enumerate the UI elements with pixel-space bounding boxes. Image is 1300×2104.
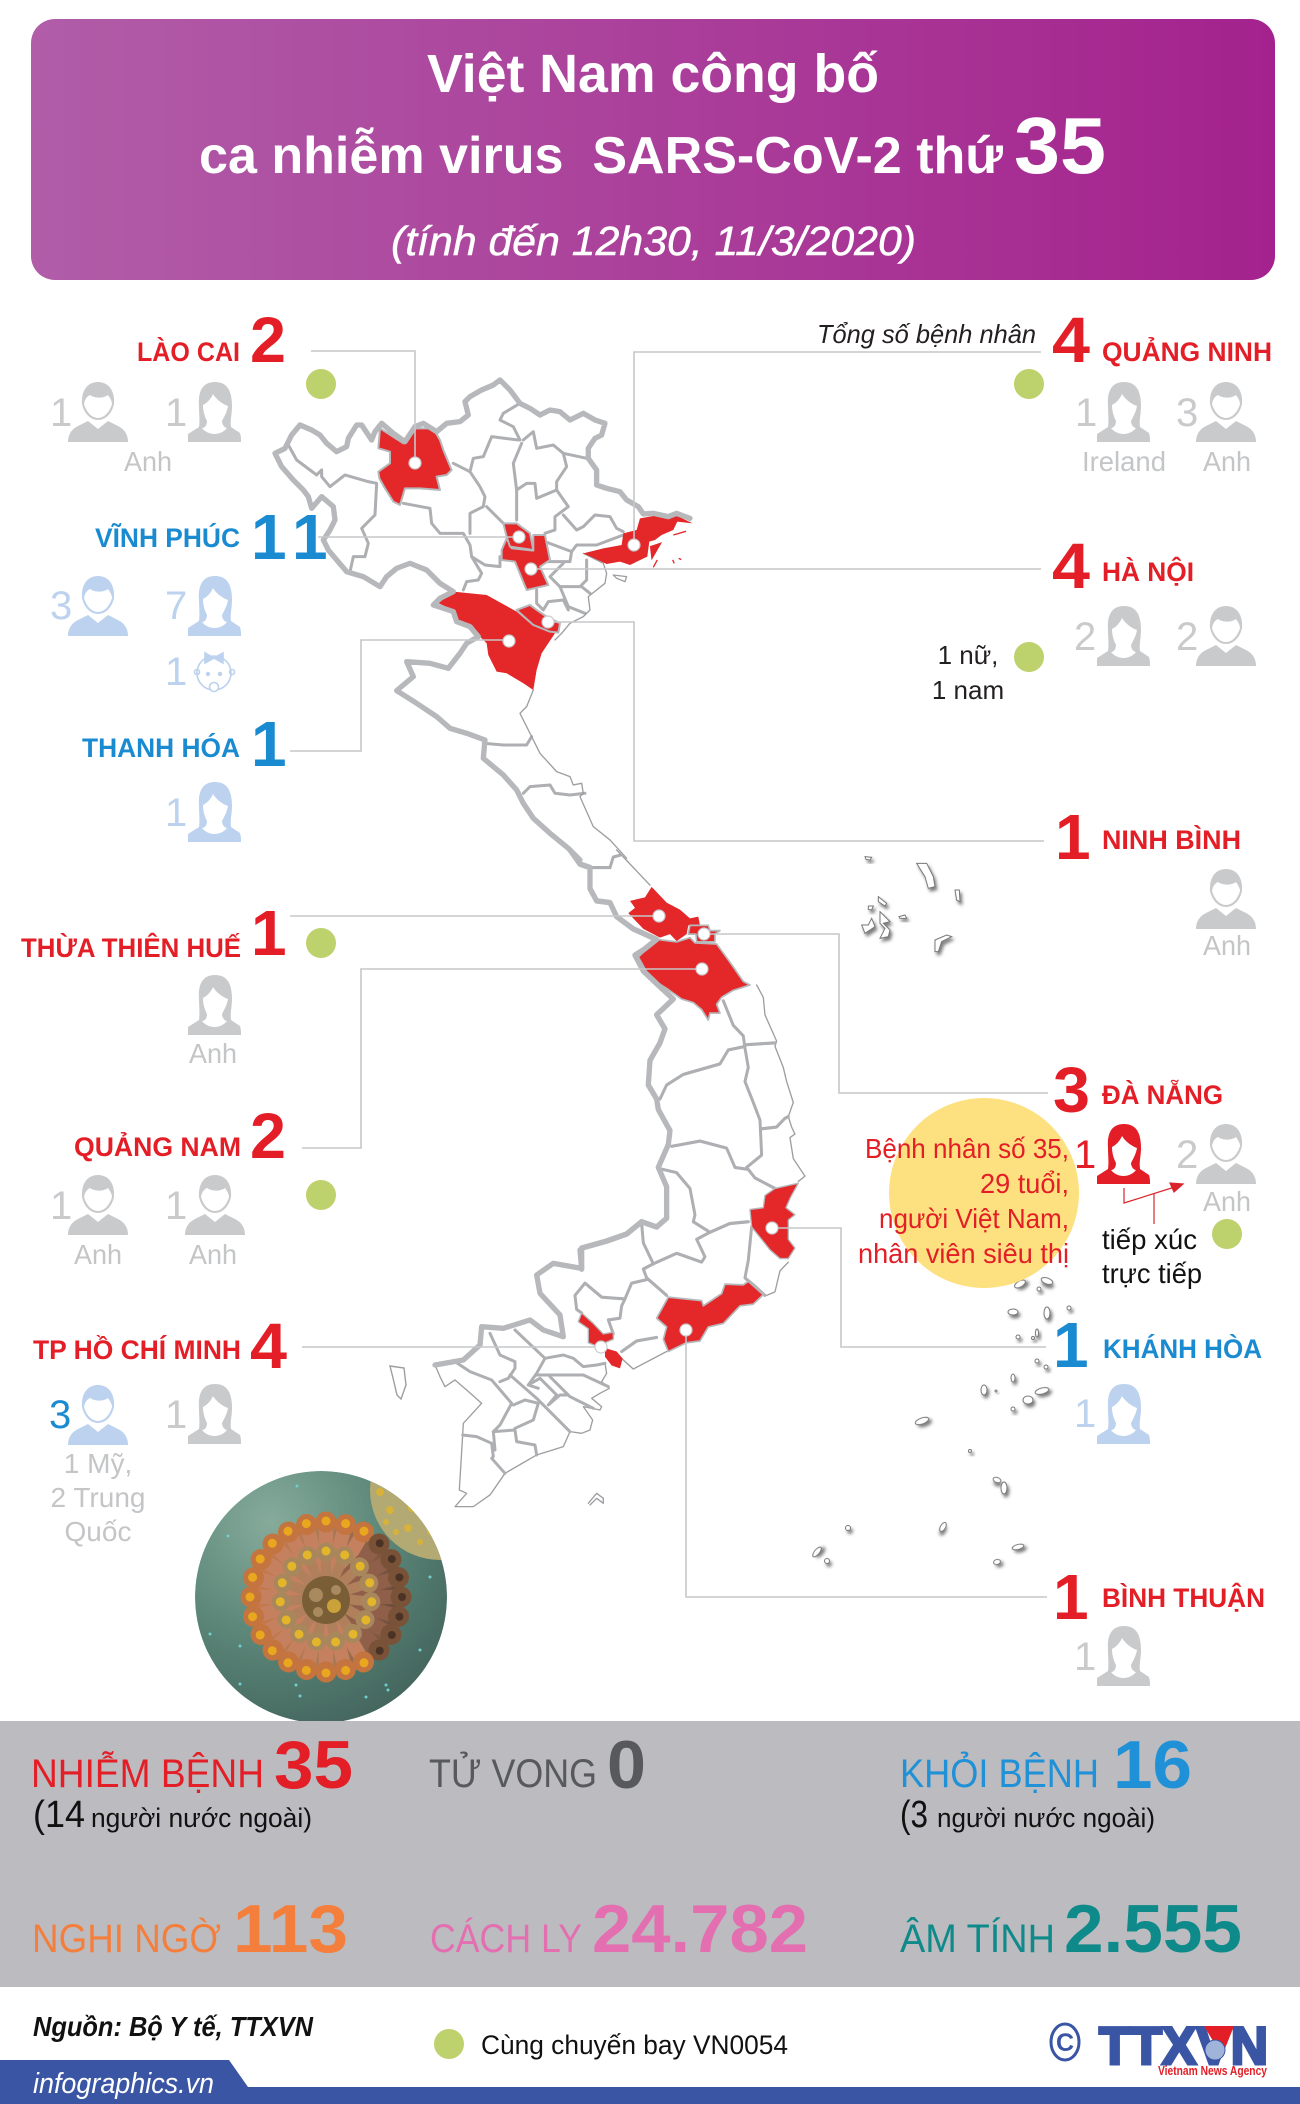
- callout: patient 35: người Việt Nam,: [879, 1203, 1069, 1234]
- note: foreigners among infected: người nước ngoài): [91, 1803, 312, 1833]
- patients: Anh: [1203, 1186, 1251, 1217]
- logo: TTXVN: Vietnam News Agency: [1158, 2063, 1268, 2078]
- patients: [50, 576, 241, 694]
- note: foreigners among infected: (14: [33, 1794, 85, 1836]
- label: NINH BÌNH: [1102, 824, 1241, 855]
- callout: patient 35: nhân viên siêu thị: [858, 1238, 1069, 1269]
- patients: [49, 1384, 241, 1445]
- title number 35: 35: [1014, 101, 1106, 190]
- patients: Anh: [74, 1239, 122, 1270]
- website: infographics.vn: [33, 2068, 214, 2100]
- patients: Anh: [1203, 446, 1251, 477]
- logo: TTXVN: C: [1056, 2029, 1074, 2057]
- province: TP Hồ Chí Minh: [578, 1313, 613, 1347]
- same-flight marker: [1014, 642, 1044, 672]
- same-flight marker: [306, 1180, 336, 1210]
- label: ĐÀ NẴNG: [1102, 1078, 1223, 1110]
- count: 1: [251, 897, 287, 969]
- stat: deaths: [429, 1727, 646, 1803]
- patient: [1196, 869, 1256, 961]
- title line 2: ca nhiễm virus SARS-CoV-2 thứ: [199, 127, 1003, 185]
- stat: suspected: [32, 1891, 348, 1967]
- note: foreigners among recovered: [900, 1794, 1155, 1836]
- stat: negative: ÂM TÍNH: [900, 1916, 1055, 1961]
- panel: TP Hồ Chí Minh: [33, 1310, 607, 1547]
- legend: same flight: Cùng chuyến bay VN0054: [481, 2030, 788, 2060]
- patients: 2: [1176, 1133, 1198, 1177]
- patient: 1: [1074, 1635, 1096, 1679]
- island: Phú Quốc: [390, 1366, 406, 1399]
- stat: recovered: 16: [1113, 1727, 1192, 1803]
- label: BÌNH THUẬN: [1102, 1582, 1265, 1613]
- count: 2: [250, 1100, 286, 1172]
- connector: [318, 536, 519, 538]
- patients: 3: [1176, 391, 1198, 435]
- panel: Quảng Ninh: [628, 304, 1272, 551]
- map: central: [570, 850, 805, 1369]
- title line 1: Việt Nam công bố: [427, 44, 879, 104]
- patient: 1: [165, 791, 187, 835]
- connector: [302, 1346, 601, 1348]
- panel: Đà Nẵng: [698, 928, 1256, 1289]
- patients: [1074, 1124, 1256, 1217]
- patient: [1074, 1384, 1150, 1444]
- same-flight marker: [306, 369, 336, 399]
- stat: quarantined: CÁCH LY: [430, 1916, 582, 1961]
- same-flight note: 1 nữ,: [938, 640, 998, 670]
- count: 4: [1052, 530, 1090, 602]
- contact note: trực tiếp: [1102, 1258, 1202, 1289]
- main virus: [240, 1512, 412, 1682]
- patients: [1075, 382, 1256, 477]
- panel: Thừa Thiên Huế: [21, 897, 665, 1069]
- patients: [1074, 606, 1256, 666]
- stat: infected: NHIỄM BỆNH: [31, 1750, 264, 1796]
- count: 1: [1053, 1561, 1089, 1633]
- callout: patient 35: [858, 1098, 1079, 1288]
- patients: Anh: [189, 1239, 237, 1270]
- count: [251, 501, 328, 573]
- label: LÀO CAI: [137, 336, 240, 367]
- patients: 1: [50, 391, 72, 435]
- label: QUẢNG NINH: [1102, 335, 1272, 367]
- floating particles: [208, 1484, 440, 1698]
- label: KHÁNH HÒA: [1103, 1333, 1262, 1364]
- label: QUẢNG NAM: [74, 1130, 241, 1162]
- thick land border central: [570, 850, 673, 1269]
- patients: 1: [50, 1184, 72, 1228]
- stat: infected: 35: [274, 1727, 353, 1803]
- count: 1: [251, 501, 287, 573]
- date subtitle: (tính đến 12h30, 11/3/2020): [391, 218, 916, 264]
- nationality note: 2 Trung: [51, 1482, 145, 1513]
- stat: negative: 2.555: [1064, 1891, 1242, 1967]
- panel: Hà Nội: [525, 530, 1256, 705]
- connector: [772, 1228, 1046, 1347]
- stat: deaths: TỬ VONG: [429, 1750, 597, 1796]
- count: 2: [250, 304, 286, 376]
- patients: [50, 1175, 245, 1270]
- same-flight marker: [1014, 369, 1044, 399]
- Hoàng Sa islands: [862, 857, 960, 952]
- panel: Vĩnh Phúc: [50, 501, 525, 694]
- count: 1: [292, 501, 328, 573]
- thick land border south: [435, 1250, 582, 1365]
- count: 3: [1053, 1054, 1090, 1126]
- stat: quarantined: [430, 1891, 808, 1967]
- patient: [165, 782, 241, 842]
- label: HÀ NỘI: [1102, 556, 1194, 587]
- panel: Thanh Hóa: [82, 635, 515, 842]
- connector: [634, 352, 1041, 545]
- panel: Ninh Bình: [542, 616, 1256, 961]
- patients: 3: [49, 1393, 71, 1437]
- connector: [290, 640, 509, 751]
- patients: Ireland: [1082, 446, 1166, 477]
- same-flight note: [932, 640, 1004, 705]
- note: foreigners among recovered: (3: [900, 1794, 928, 1836]
- footer band: [0, 2060, 1300, 2104]
- source: Nguồn: Bộ Y tế, TTXVN: [33, 2011, 314, 2042]
- count: 4: [250, 1310, 287, 1382]
- map: north: [275, 380, 693, 860]
- province: Vĩnh Phúc: [503, 523, 533, 550]
- patients: 7: [165, 584, 187, 628]
- count: 1: [1053, 1309, 1089, 1381]
- province: Quảng Ninh: [583, 514, 693, 565]
- count: 1: [1055, 801, 1091, 873]
- callout: patient 35: 29 tuổi,: [980, 1168, 1069, 1199]
- nationality note: Quốc: [65, 1516, 131, 1547]
- label: THANH HÓA: [82, 732, 240, 763]
- panel: Khánh Hòa: [766, 1222, 1262, 1444]
- title banner: [31, 19, 1275, 280]
- patients: 1: [1075, 391, 1097, 435]
- patient: Anh: [1203, 930, 1251, 961]
- map of Vietnam: [275, 380, 1071, 1565]
- footer: [0, 2011, 1300, 2104]
- label: THỪA THIÊN HUẾ: [21, 932, 241, 963]
- patient: Anh: [189, 1038, 237, 1069]
- stat: recovered: [900, 1727, 1192, 1803]
- same-flight note: 1 nam: [932, 675, 1004, 705]
- stat: quarantined: 24.782: [592, 1891, 808, 1967]
- connector: [686, 1330, 1047, 1597]
- patients: 1: [165, 1184, 187, 1228]
- connector: [704, 934, 1048, 1093]
- patients: 2: [1176, 615, 1198, 659]
- map: Mekong delta: [435, 1250, 609, 1507]
- province: Ninh Bình: [517, 605, 560, 633]
- connector: [548, 622, 1044, 841]
- contact note: [1102, 1224, 1202, 1289]
- province: Quảng Nam: [638, 938, 750, 1020]
- province: Thanh Hóa: [438, 592, 555, 690]
- patients: 2: [1074, 615, 1096, 659]
- label: TP HỒ CHÍ MINH: [33, 1334, 241, 1365]
- connector: [311, 351, 415, 463]
- count: 4: [1052, 304, 1090, 376]
- patients: 1: [1074, 1133, 1096, 1177]
- connector: [531, 568, 1041, 570]
- panel: Bình Thuận: [680, 1324, 1265, 1686]
- callout: patient 35: Bệnh nhân số 35,: [865, 1133, 1069, 1164]
- arrow: direct contact: [1124, 1183, 1183, 1224]
- province: Hà Nội: [502, 535, 550, 590]
- Trường Sa islands: [811, 1276, 1071, 1565]
- contact note: tiếp xúc: [1102, 1224, 1197, 1255]
- note: foreigners among recovered: người nước ngoài): [937, 1803, 1155, 1833]
- patient: 1: [1074, 1392, 1096, 1436]
- logo: TTXVN: TTXVN: [1099, 2017, 1268, 2076]
- thick land border north: [275, 380, 690, 860]
- stat: suspected: NGHI NGỜ: [32, 1916, 221, 1961]
- panel: statistics: [0, 1721, 1300, 1987]
- stat: infected: [31, 1727, 353, 1803]
- patients: 1: [165, 391, 187, 435]
- virus image: [195, 1471, 447, 1721]
- icon: baby: [194, 653, 234, 692]
- patient: [188, 975, 241, 1069]
- same-flight marker: [1212, 1219, 1242, 1249]
- province: Thừa Thiên Huế: [628, 887, 700, 941]
- stat: negative: [900, 1891, 1242, 1967]
- nationality note: 1 Mỹ,: [64, 1448, 132, 1479]
- panel: Quảng Nam: [50, 963, 708, 1270]
- second virus: [370, 1481, 442, 1560]
- stat: deaths: 0: [607, 1727, 646, 1803]
- patients: [50, 382, 241, 477]
- count: 1: [251, 708, 287, 780]
- province: Khánh Hòa: [750, 1183, 798, 1259]
- province: Lào Cai: [378, 428, 452, 505]
- connector: [302, 969, 702, 1148]
- stat: recovered: KHỎI BỆNH: [900, 1750, 1099, 1796]
- note: foreigners among infected: [33, 1794, 312, 1836]
- patients: 1: [165, 650, 187, 694]
- patient: [1074, 1626, 1150, 1686]
- patients: 1: [165, 1393, 187, 1437]
- stat: suspected: 113: [233, 1891, 348, 1967]
- label: VĨNH PHÚC: [95, 522, 240, 553]
- note: total patients legend: Tổng số bệnh nhân: [817, 319, 1036, 349]
- patients: 3: [50, 584, 72, 628]
- connector: [290, 915, 659, 917]
- nationality note: [51, 1448, 145, 1547]
- same-flight marker: [306, 928, 336, 958]
- panel: Lào Cai: [50, 304, 421, 477]
- province: Bình Thuận: [657, 1281, 763, 1352]
- province: Đà Nẵng: [688, 925, 720, 942]
- patients: Anh: [124, 446, 172, 477]
